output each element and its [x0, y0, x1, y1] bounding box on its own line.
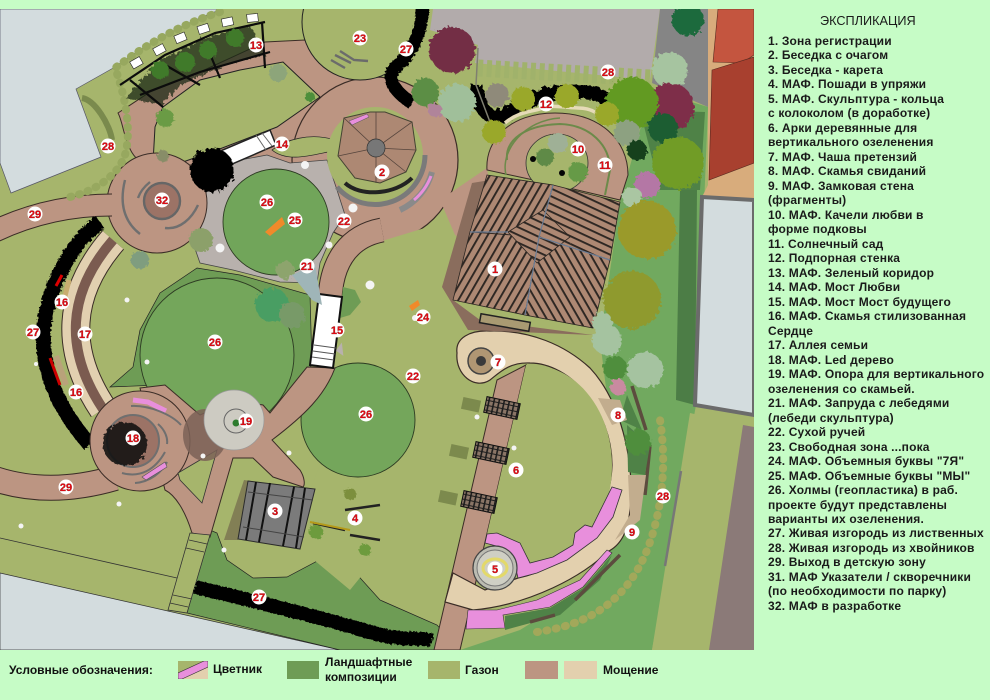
- number markers: [26, 30, 670, 604]
- green garden below pink: [505, 555, 612, 630]
- vertical paved path: [434, 365, 526, 650]
- lawn strip right: [652, 413, 694, 650]
- paving around circle 19: [140, 367, 335, 537]
- benches 18: [122, 400, 181, 483]
- number markers: 22: [407, 371, 419, 383]
- paved path fill: [330, 230, 382, 298]
- gazebo carriage 3: [224, 480, 315, 549]
- legend: [9, 655, 658, 684]
- number markers: 1: [492, 264, 498, 276]
- neighbouring plot bottom left: [0, 573, 340, 650]
- paved area top: [117, 40, 352, 166]
- led tree 18: [103, 422, 147, 466]
- paved link to building: [443, 168, 488, 236]
- site plan: [0, 9, 754, 650]
- white beams: [130, 13, 258, 69]
- bridge 14: [218, 130, 276, 165]
- sculpture rings 5: [473, 546, 517, 590]
- number markers: 22: [338, 216, 350, 228]
- number markers: 3: [272, 506, 278, 518]
- legend swatch: paving: [525, 661, 558, 679]
- path 29 lower fill: [0, 478, 115, 488]
- number markers: 23: [354, 33, 366, 45]
- legend label: paving: Мощение: [603, 663, 658, 677]
- number markers: 17: [79, 329, 91, 341]
- green zone around hill: [110, 268, 312, 413]
- letters МЫ: [265, 217, 285, 236]
- paved circle gazebo: [292, 77, 458, 243]
- dark green strip: [676, 190, 697, 405]
- building 1 terrace: [442, 180, 593, 335]
- lawn base: [0, 9, 754, 650]
- number markers: 8: [615, 410, 621, 422]
- number markers: 2: [379, 167, 385, 179]
- garden strip right: [460, 90, 708, 650]
- bottom green zone: [187, 530, 460, 650]
- benches zone 23: [331, 51, 368, 68]
- number markers: 12: [540, 99, 552, 111]
- number markers: 29: [29, 209, 41, 221]
- conifer hedge 28 top: [478, 68, 650, 78]
- fence: [476, 48, 490, 122]
- number markers: 18: [127, 433, 139, 445]
- legend swatch: flowerbed: [178, 661, 208, 679]
- number markers: 11: [599, 160, 611, 172]
- red roof lower: [709, 57, 754, 180]
- hill 26 upper: [223, 169, 329, 275]
- explication list: [768, 14, 984, 613]
- number markers: 24: [417, 312, 430, 324]
- gazebo 2: [327, 107, 432, 210]
- hill 26 right: [301, 363, 415, 477]
- dark beds: [620, 395, 650, 475]
- trophy bowl 7: [468, 348, 494, 374]
- number markers: 14: [276, 139, 289, 151]
- number markers: 4: [352, 513, 359, 525]
- flowerbed pink outer: [466, 550, 612, 629]
- bridge 15: [310, 294, 342, 368]
- wall line: [665, 471, 681, 566]
- terrace benches: [480, 314, 530, 331]
- trees: [255, 4, 704, 455]
- inner ring 32: [144, 183, 180, 219]
- number markers: 10: [572, 144, 584, 156]
- number markers: 25: [289, 215, 301, 227]
- legend label: landscape compositions: Ландшафтные композиции: [325, 655, 412, 684]
- lawn patch below bridge: [340, 287, 361, 318]
- legend swatch: lawn: [428, 661, 460, 679]
- number markers: 29: [60, 482, 72, 494]
- number markers: 27: [27, 327, 39, 339]
- number markers: 32: [156, 195, 168, 207]
- house: [702, 9, 754, 200]
- concrete patches on cream: [598, 398, 646, 540]
- family alley: [76, 240, 113, 409]
- number markers: 28: [102, 141, 114, 153]
- dark green strip 2: [640, 110, 705, 190]
- paved circle 10: [487, 113, 628, 200]
- lawn area with label 24: [316, 228, 434, 590]
- paved circle 32: [107, 153, 207, 253]
- number markers: 5: [492, 564, 498, 576]
- shrubs in lawn leaf: [131, 64, 315, 269]
- number markers: 28: [657, 491, 669, 503]
- building 1 roof: [453, 175, 620, 328]
- lamps: [18, 161, 516, 552]
- pavilion 19: [183, 390, 264, 461]
- retaining wall 12: [505, 106, 605, 125]
- number markers: 6: [513, 465, 519, 477]
- green corridor 13: [120, 13, 270, 107]
- lawn patch near bridge 14: [272, 137, 340, 157]
- number markers: 9: [629, 527, 635, 539]
- black tree near 14: [190, 148, 234, 192]
- walkway right: [709, 425, 754, 650]
- number markers: 27: [253, 592, 265, 604]
- number markers: 26: [261, 197, 273, 209]
- neighbouring plot top centre: [430, 9, 660, 80]
- alley centre band: [76, 240, 113, 409]
- bench arcs 32: [123, 180, 198, 234]
- paved path from circle to bridge: [330, 230, 382, 298]
- text: ЭКСПЛИКАЦИЯ: [820, 14, 916, 28]
- black hedge 27 right top: [391, 5, 423, 103]
- paved circle 18: [90, 391, 190, 491]
- legend label: lawn: Газон: [465, 663, 499, 677]
- number markers: 16: [70, 387, 82, 399]
- number markers: 27: [400, 44, 412, 56]
- path 29 upper fill: [0, 205, 112, 231]
- text: 1. Зона регистрации 2. Беседка с очагом 3. Беседка - карета 4. МАФ. Пошади в упряжи 5. МАФ. Скульптура - кольца с колоколом (в доработке) 6. Арки деревянные для вертикального озеленения 7. МАФ. Чаша претензий 8. МАФ. Скамья свиданий 9. МАФ. Замковая стена (фрагменты) 10. МАФ. Качели любви в форме подковы 11. Солнечный сад 12. Подпорная стенка 13. МАФ. Зеленый коридор 14. МАФ. Мост Любви 15. МАФ. Мост Мост будущего 16. МАФ. Скамья стилизованная Сердце 17. Аллея семьи 18. МАФ. Led дерево 19. МАФ. Опора для вертикального озеленения со скамьей. 21. МАФ. Запруда с лебедями (лебеди скульптура) 22. Сухой ручей 23. Свободная зона ...пока 24. МАФ. Объемныя буквы "7Я" 25. МАФ. Объемные буквы "МЫ" 26. Холмы (геопластика) в раб. проекте будут представлены варианты их озеленения. 27. Живая изгородь из лиственных 28. Живая изгородь из хвойников 29. Выход в детскую зону 31. МАФ Указатели / скворечники (по необходимости по парку) 32. МАФ в разработке: [768, 34, 984, 613]
- path 29 lower: [0, 478, 115, 488]
- lawn inner circle: [487, 365, 612, 563]
- free zone 23: [302, 9, 386, 80]
- horses sculpture 4: [309, 488, 380, 556]
- grass steps: [0, 533, 210, 613]
- path 29 upper: [0, 205, 112, 231]
- olive shrubs by wall 12: [482, 84, 619, 144]
- grey dry creek ring: [192, 155, 345, 283]
- dry creek end: [392, 355, 434, 397]
- neighbouring plot top left: [0, 9, 222, 193]
- flowerbed pink inner: [485, 487, 622, 578]
- number markers: 7: [495, 357, 501, 369]
- letters 7Я: [409, 300, 420, 311]
- legend label: flowerbed: Цветник: [213, 662, 262, 676]
- conifer hedge 28 left: [70, 12, 220, 197]
- bench heart 16: [50, 275, 69, 385]
- dry creek branch: [336, 342, 344, 356]
- legend swatch: landscape compositions: [287, 661, 319, 679]
- black hedge behind wall 12: [476, 85, 612, 117]
- swing of love 10: [530, 133, 588, 182]
- number markers: 13: [250, 40, 262, 52]
- hill 26 centre: [140, 278, 294, 412]
- arches 6: [438, 397, 520, 513]
- swan pond 21: [292, 265, 322, 305]
- legend title: Условные обозначения:: [9, 663, 153, 677]
- conifer hedge 28: [537, 420, 663, 632]
- number markers: 15: [331, 325, 343, 337]
- cream paving: [445, 331, 631, 610]
- hedge 27 left: [43, 222, 100, 445]
- number markers: 19: [240, 416, 252, 428]
- number markers: 28: [602, 67, 614, 79]
- lawn leaf under green corridor: [153, 62, 320, 163]
- hedge 27 bottom: [195, 587, 432, 640]
- building right: [695, 197, 754, 415]
- number markers: 26: [360, 409, 372, 421]
- road top right: [652, 9, 708, 107]
- alley cream band: [76, 240, 113, 409]
- legend swatch: cream paving: [564, 661, 597, 679]
- lawn wedge: [178, 450, 217, 503]
- number markers: 21: [301, 261, 313, 273]
- dark mound near 28: [82, 98, 112, 140]
- pad under led tree: [107, 415, 159, 467]
- number markers: 16: [56, 297, 68, 309]
- castle wall fragments: [530, 386, 650, 622]
- red roof upper: [713, 9, 754, 63]
- number markers: 26: [209, 337, 221, 349]
